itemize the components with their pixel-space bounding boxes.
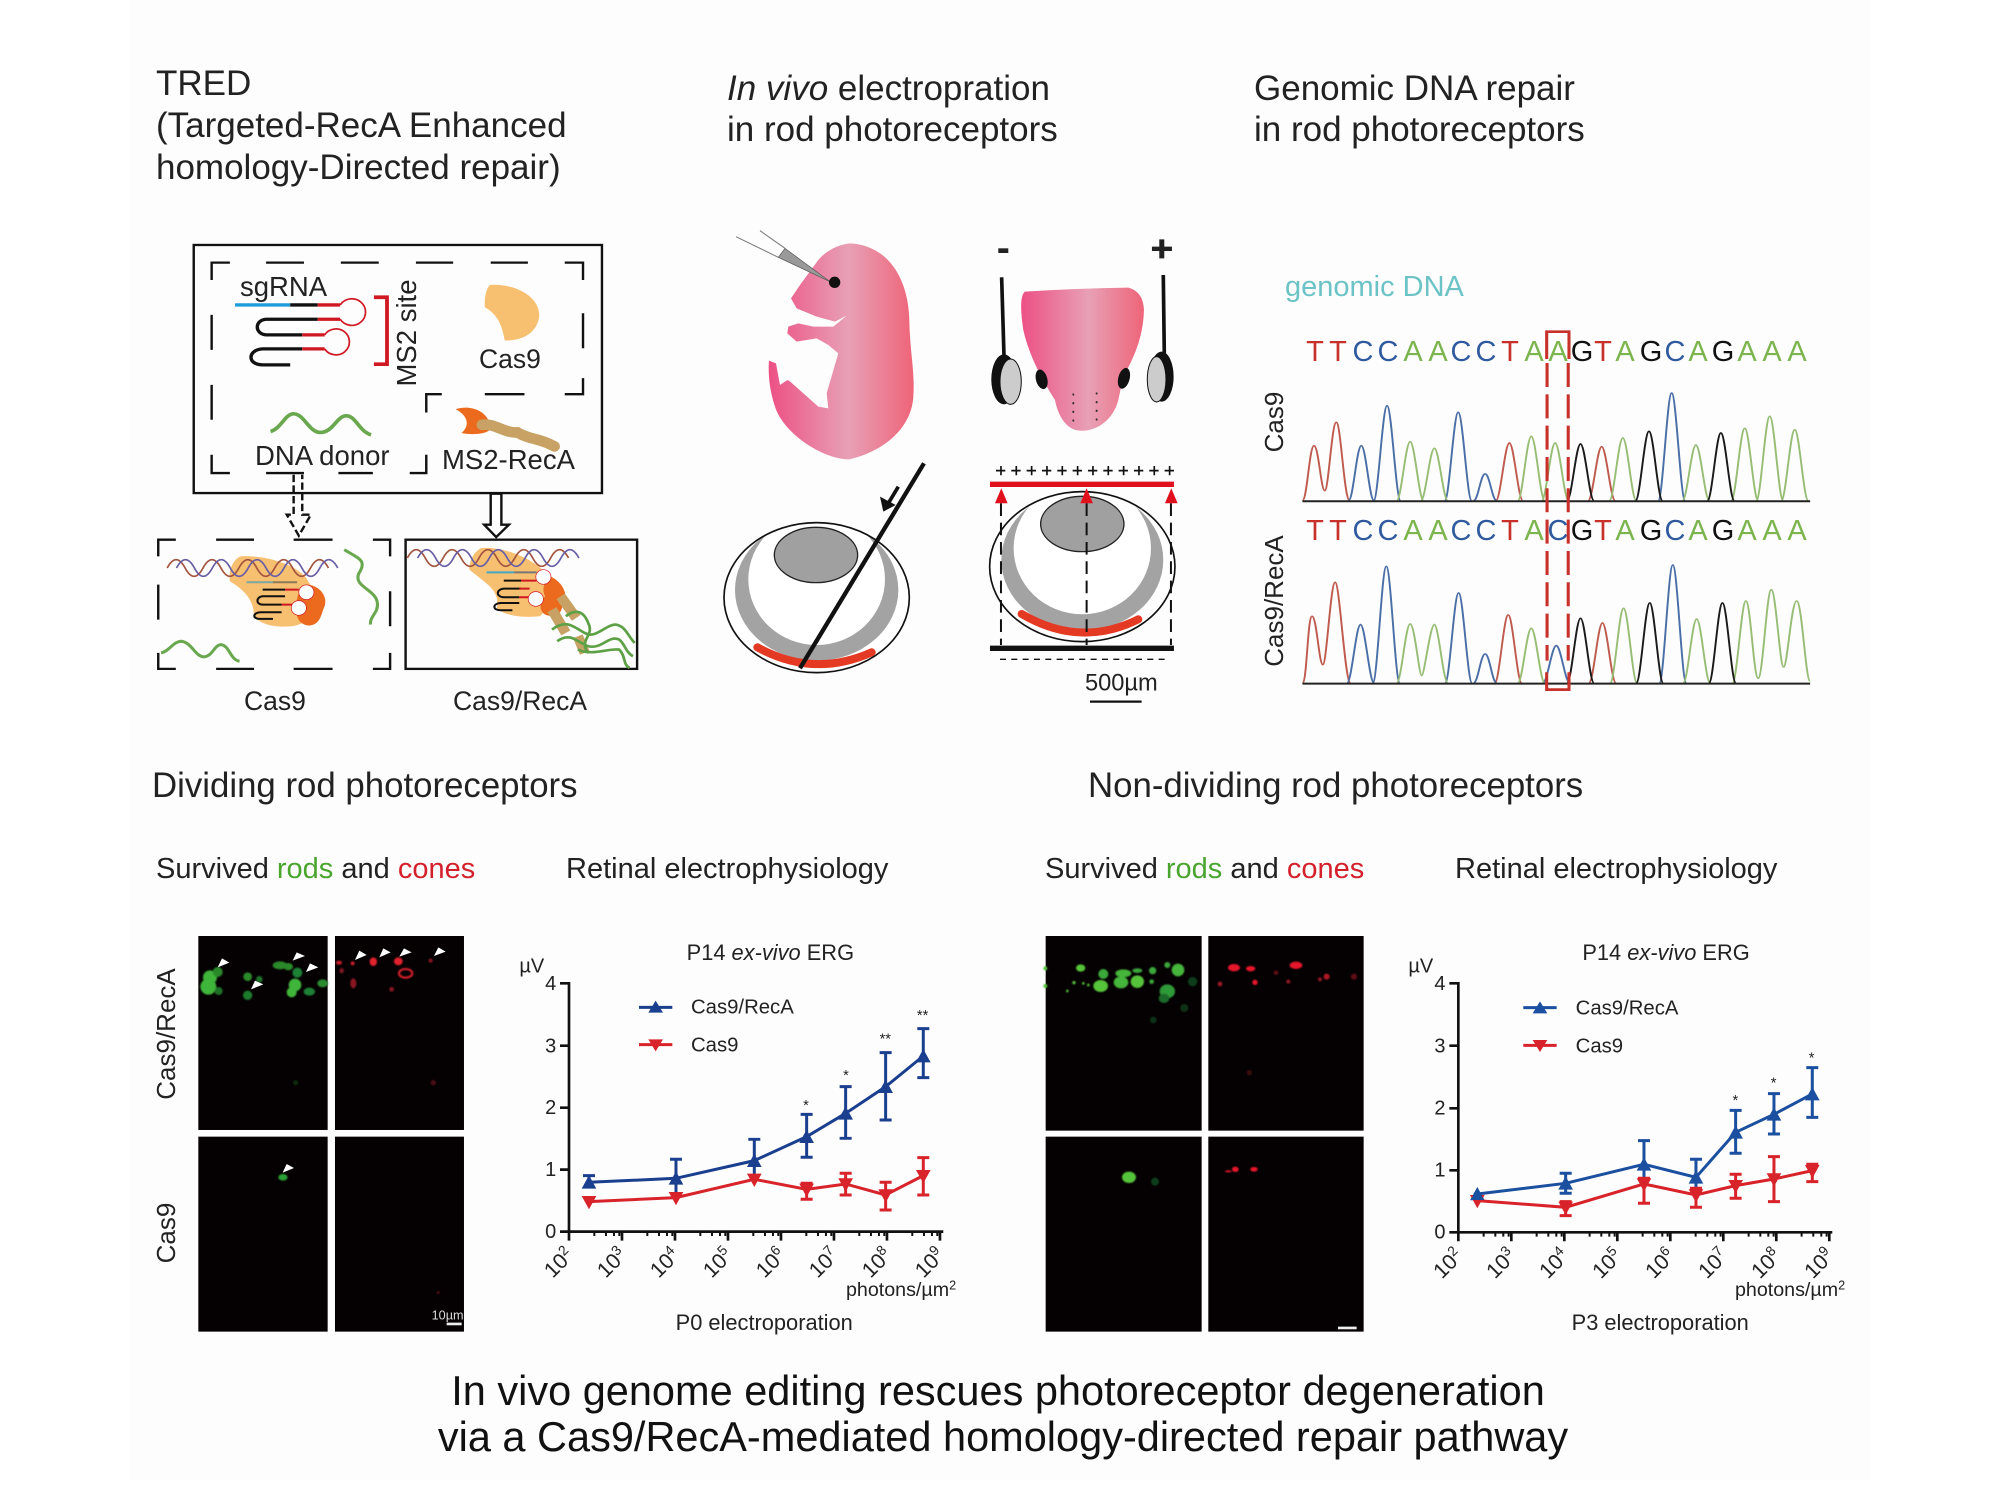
axes: 6 [1656, 1242, 1673, 1259]
icon: neonatal mouse with needle [736, 231, 914, 459]
arrowheads [218, 947, 446, 1173]
sequence: Cas9: C [1476, 336, 1496, 368]
icon: eye between electrodes [990, 466, 1178, 659]
axes: P3 electroporation [1572, 1310, 1749, 1335]
series: Cas9/RecA [1470, 1068, 1820, 1200]
sequence: Cas9/RecA: A [1524, 515, 1544, 547]
label: Cas9/RecA row: Cas9/RecA [1259, 535, 1289, 667]
axes: 10 [1641, 1249, 1674, 1283]
sequence: Cas9: A [1615, 336, 1635, 368]
axes: 10 [698, 1249, 732, 1282]
significance stars: ** [880, 1031, 891, 1047]
axes: 10 [1694, 1249, 1727, 1283]
solid arrow [484, 494, 509, 537]
sequence: Cas9: A [1403, 336, 1423, 368]
axes: 2 [1444, 1242, 1461, 1259]
panel: TRED diagram [158, 245, 637, 716]
sequence: Cas9: T [1306, 336, 1324, 368]
legend: Cas9 [1576, 1035, 1623, 1057]
sequence: Cas9: T [1329, 336, 1347, 368]
label: Cas9/RecA row: Cas9/RecA [151, 968, 181, 1100]
sequence: Cas9/RecA: C [1548, 515, 1568, 547]
dashed component outline [212, 263, 583, 473]
chromatogram: Cas9 [1302, 393, 1810, 501]
legend: Cas9/RecA [1576, 997, 1679, 1019]
axes: 10 [1429, 1249, 1462, 1283]
label: MS2-RecA: MS2-RecA [442, 444, 576, 475]
heading: genomic DNA repair: in rod photoreceptors [1254, 110, 1585, 149]
legend: Cas9/RecA [691, 996, 794, 1018]
heading: genomic DNA repair: Genomic DNA repair [1254, 69, 1575, 108]
sequence: Cas9: T [1501, 336, 1519, 368]
free DNA donors [161, 550, 377, 661]
axes: 3 [1497, 1242, 1514, 1259]
axes: 7 [820, 1242, 837, 1259]
complex: Cas9/RecA bound to DNA [407, 548, 635, 668]
sequence: Cas9/RecA: C [1378, 515, 1398, 547]
highlight: mutated base [1547, 332, 1569, 690]
heading: genomic DNA repair [1254, 69, 1585, 149]
sequence: Cas9/RecA: C [1353, 515, 1373, 547]
axes: 4 [1550, 1242, 1567, 1259]
axes: photons/µm [846, 1279, 949, 1301]
sequence: Cas9/RecA: A [1403, 515, 1423, 547]
chart title: P14 ex-vivo ERG [1582, 940, 1750, 965]
axes: 3 [1434, 1035, 1446, 1057]
sequence: Cas9/RecA: T [1329, 515, 1347, 547]
sequence: Cas9/RecA: A [1688, 515, 1708, 547]
red cells [336, 957, 440, 1294]
label: Cas9 row: Cas9 [151, 1203, 181, 1263]
outer box [194, 245, 602, 493]
panel: electroporation diagrams [724, 231, 1178, 702]
green cells [1043, 962, 1197, 1186]
sequence: Cas9: A [1428, 336, 1448, 368]
axes: P0 electroporation [676, 1310, 853, 1335]
label: DNA donor: DNA donor [255, 440, 390, 471]
axes: 7 [1709, 1242, 1726, 1259]
axes: 0 [545, 1221, 556, 1243]
axes: 10 [645, 1249, 679, 1282]
significance stars [1732, 1050, 1815, 1109]
axes: 3 [545, 1035, 556, 1057]
axes: 2 [949, 1278, 956, 1292]
sequence: Cas9/RecA: G [1640, 515, 1662, 547]
heading: non-dividing rods: Non-dividing rod photoreceptors [1088, 766, 1583, 805]
subheading: electrophysiology left: Retinal electrophysiology [566, 853, 889, 885]
icon: mouse head between electrodes [991, 239, 1174, 431]
micrographs: dividing rods [198, 936, 464, 1332]
axes: 10 [804, 1249, 838, 1282]
axes: 10 [1747, 1249, 1780, 1283]
axes: 10 [539, 1249, 573, 1282]
axes: 2 [1838, 1278, 1845, 1292]
heading: in vivo electroporation [727, 69, 1058, 149]
axes [519, 956, 956, 1335]
sequence: Cas9/RecA: T [1306, 515, 1324, 547]
heading: TRED: TRED [156, 64, 251, 103]
legend: Cas9 [691, 1034, 738, 1056]
sequence: Cas9: G [1640, 336, 1662, 368]
axes: 2 [555, 1242, 572, 1259]
chromatogram: Cas9/RecA [1302, 565, 1810, 684]
sequence: Cas9: G [1712, 336, 1734, 368]
sequence: Cas9: A [1737, 336, 1757, 368]
heading: in vivo electroporation: in rod photoreceptors [727, 110, 1058, 149]
red cells [1218, 962, 1357, 1172]
sequence: Cas9/RecA: A [1737, 515, 1757, 547]
sequence: Cas9: C [1353, 336, 1373, 368]
significance stars: * [1771, 1076, 1777, 1092]
axes: 10 [592, 1249, 626, 1282]
heading: TRED: homology-Directed repair) [156, 148, 561, 187]
significance stars [803, 1008, 929, 1114]
dashed arrow [287, 475, 311, 536]
sequence: Cas9: C [1378, 336, 1398, 368]
series: Cas9 [1470, 1157, 1820, 1216]
sequence: Cas9/RecA: T [1594, 515, 1612, 547]
sequence: Cas9 [1306, 336, 1807, 368]
sequence: Cas9: A [1548, 336, 1568, 368]
heading: dividing rods: Dividing rod photoreceptors [152, 766, 578, 805]
axes: 5 [714, 1242, 731, 1259]
sequence: Cas9/RecA: C [1665, 515, 1685, 547]
heading: TRED [156, 64, 567, 187]
axes: 10 [1482, 1249, 1515, 1283]
significance stars: * [1809, 1050, 1815, 1066]
axes: 4 [1434, 973, 1446, 995]
sequence: Cas9/RecA: C [1451, 515, 1471, 547]
sequence: Cas9/RecA: A [1428, 515, 1448, 547]
axes: 1 [1434, 1160, 1446, 1182]
axes: 10 [1535, 1249, 1568, 1283]
axes: 0 [1434, 1222, 1446, 1244]
significance stars: * [1732, 1093, 1738, 1109]
main conclusion text: In vivo genome editing rescues photoreceptor degeneration [451, 1367, 1545, 1414]
sequence: Cas9: T [1594, 336, 1612, 368]
panel: genomic DNA chromatograms [1259, 271, 1810, 690]
label: Cas9 protein: Cas9 [479, 344, 541, 374]
sequence: Cas9: A [1524, 336, 1544, 368]
sequence: Cas9/RecA: A [1615, 515, 1635, 547]
label: sgRNA: sgRNA [240, 271, 328, 302]
label: MS2 site: MS2 site [391, 280, 422, 386]
axes: 10 [910, 1249, 944, 1282]
chart: P3 electroporation ERG [1408, 940, 1845, 1335]
sequence: Cas9/RecA: C [1476, 515, 1496, 547]
label: Cas9 condition: Cas9 [244, 686, 306, 716]
label: Cas9/RecA condition: Cas9/RecA [453, 686, 587, 716]
sequence: Cas9: C [1451, 336, 1471, 368]
sequence: Cas9: C [1665, 336, 1685, 368]
sequence: Cas9: A [1787, 336, 1807, 368]
box: Cas9 result [158, 540, 390, 669]
icon: eye subretinal injection [724, 463, 924, 673]
axes: 2 [1434, 1098, 1446, 1120]
series: Cas9 [582, 1158, 931, 1210]
axes: 8 [1762, 1242, 1779, 1259]
subheading: electrophysiology right: Retinal electrophysiology [1455, 853, 1778, 885]
sequence: Cas9: A [1762, 336, 1782, 368]
axes: 4 [545, 973, 556, 995]
icon: sgRNA hairpin [235, 299, 366, 365]
label: Cas9 row: Cas9 [1259, 392, 1289, 452]
axes: µV [1408, 956, 1434, 978]
chart title: P14 ex-vivo ERG [687, 940, 854, 965]
axes: 10 [1588, 1249, 1621, 1283]
significance stars: ** [917, 1008, 929, 1024]
micrographs: non-dividing rods [1043, 936, 1364, 1332]
axes [1408, 956, 1845, 1335]
icon: Cas9 protein [485, 285, 539, 341]
icon: MS2-RecA [456, 408, 554, 446]
axes: 2 [545, 1097, 556, 1119]
icon: DNA donor strand [271, 414, 371, 435]
subheading: survived rods and cones left: Survived rods and cones [156, 853, 475, 885]
heading: TRED: (Targeted-RecA Enhanced [156, 106, 567, 145]
main conclusion text [438, 1367, 1568, 1460]
axes: 6 [767, 1242, 784, 1259]
series: Cas9/RecA [582, 1029, 931, 1197]
axes: 8 [873, 1242, 890, 1259]
box: Cas9/RecA result [406, 540, 637, 669]
main conclusion text: via a Cas9/RecA-mediated homology-directed repair pathway [438, 1413, 1568, 1460]
sequence: Cas9/RecA: A [1787, 515, 1807, 547]
sequence: Cas9: G [1571, 336, 1593, 368]
axes: µV [519, 956, 545, 978]
bracket: MS2 site [374, 297, 387, 364]
axes: 3 [608, 1242, 625, 1259]
label: genomic DNA: genomic DNA [1285, 271, 1465, 303]
sequence: Cas9/RecA: T [1501, 515, 1519, 547]
chart: P0 electroporation ERG [519, 940, 956, 1335]
legend [1523, 997, 1679, 1057]
complex: Cas9 bound to DNA [167, 556, 338, 627]
green cells [200, 961, 328, 1181]
axes: 4 [661, 1242, 678, 1259]
axes: 10 [857, 1249, 891, 1282]
scale bar [1338, 1327, 1357, 1329]
sequence: Cas9/RecA: A [1762, 515, 1782, 547]
axes: 9 [1815, 1242, 1832, 1259]
sequence: Cas9: A [1688, 336, 1708, 368]
sequence: Cas9/RecA: G [1712, 515, 1734, 547]
axes: photons/µm [1735, 1279, 1838, 1301]
scale bar: 500 micrometres: 500µm [1085, 670, 1158, 696]
significance stars: * [843, 1068, 849, 1084]
significance stars: * [803, 1098, 809, 1114]
scale bar: 10 micrometres: 10µm [432, 1308, 464, 1322]
subheading: survived rods and cones right: Survived rods and cones [1045, 853, 1364, 885]
heading: in vivo electroporation: In vivo electropration [727, 69, 1050, 108]
axes: 10 [1800, 1249, 1833, 1283]
axes: 9 [926, 1242, 943, 1259]
axes: 1 [545, 1159, 556, 1181]
sequence: Cas9/RecA [1306, 515, 1807, 547]
sequence: Cas9/RecA: G [1571, 515, 1593, 547]
legend [639, 996, 794, 1056]
axes: 10 [751, 1249, 785, 1282]
axes: 5 [1603, 1242, 1620, 1259]
